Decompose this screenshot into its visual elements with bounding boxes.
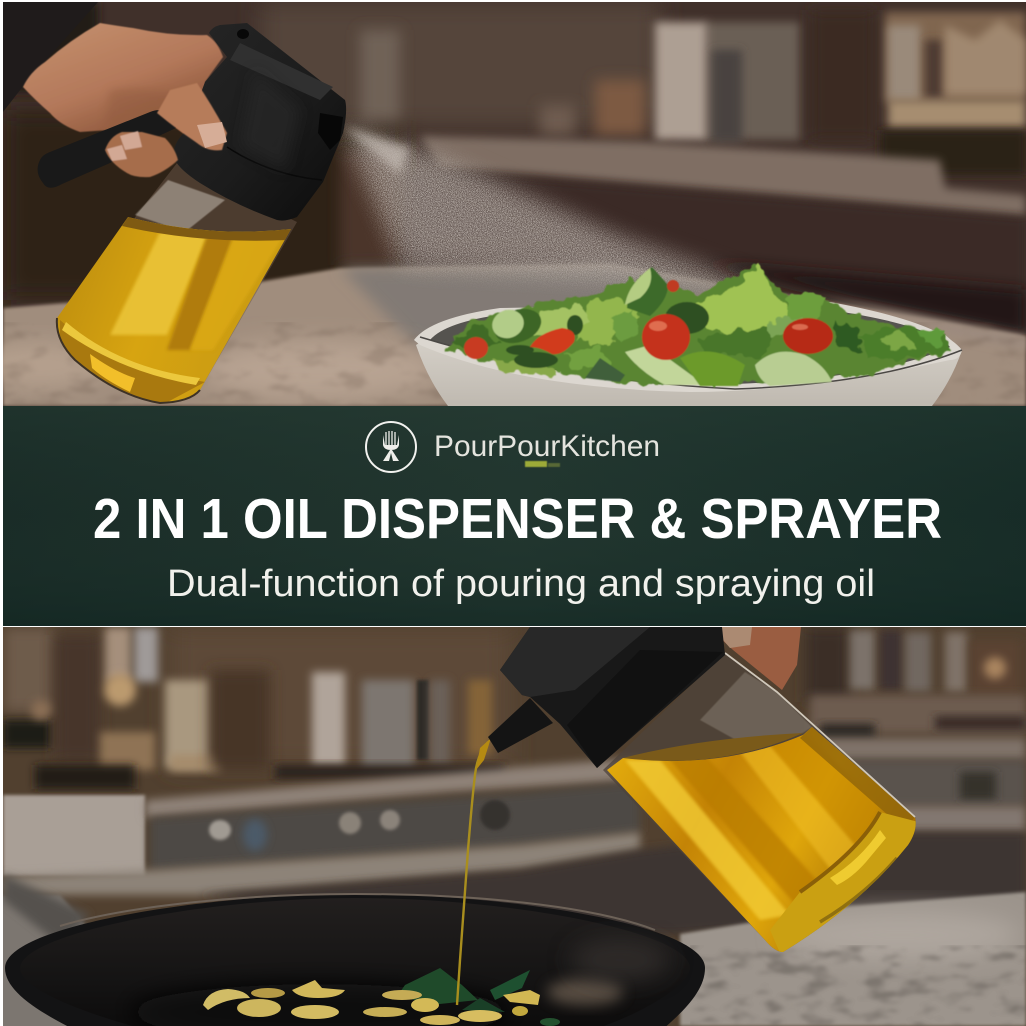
blurred kitchen background — [3, 2, 1026, 406]
subheading: Dual-function of pouring and spraying oil — [167, 563, 875, 605]
pour bottle cap — [500, 627, 725, 768]
sprayer cap — [174, 23, 346, 221]
garlic slices and herbs — [203, 968, 560, 1026]
oil highlights — [625, 727, 930, 960]
frying pan — [5, 894, 705, 1026]
hand holding sprayer — [22, 22, 224, 134]
salad bowl — [414, 302, 962, 406]
oil stream — [457, 742, 488, 1005]
small yellow artefact under brand — [525, 461, 560, 467]
oil drop at spout — [476, 738, 491, 770]
hand holding bottle — [724, 627, 801, 690]
marble countertop — [0, 264, 1026, 406]
thumb over handle — [157, 83, 227, 150]
marble counter — [0, 892, 1026, 1026]
oil highlights — [60, 217, 291, 406]
thumb nail — [722, 627, 752, 648]
cherry tomatoes — [464, 280, 833, 360]
pour spout — [488, 698, 553, 753]
oil bottle glass body (spray) — [57, 163, 297, 406]
thumbnail — [197, 122, 227, 148]
main heading: 2 IN 1 OIL DISPENSER & SPRAYER — [93, 487, 942, 551]
oil mist spray — [344, 127, 760, 290]
pan handle — [3, 874, 90, 945]
title band — [3, 406, 1026, 626]
oil bottle glass body (pour) — [603, 653, 930, 960]
sleeve — [3, 2, 98, 112]
photo: spraying oil on salad — [0, 2, 1026, 406]
fingers under handle — [105, 131, 178, 177]
photo: pouring oil into pan — [0, 627, 1026, 1026]
cucumber slices — [488, 267, 832, 386]
blurred kitchen background — [3, 627, 1026, 1026]
brand name: PourPourKitchen — [434, 430, 660, 463]
salad leaves — [445, 264, 948, 386]
logo icon — [366, 422, 416, 472]
dark broccoli florets — [506, 302, 709, 368]
sprayer trigger handle — [38, 110, 176, 188]
